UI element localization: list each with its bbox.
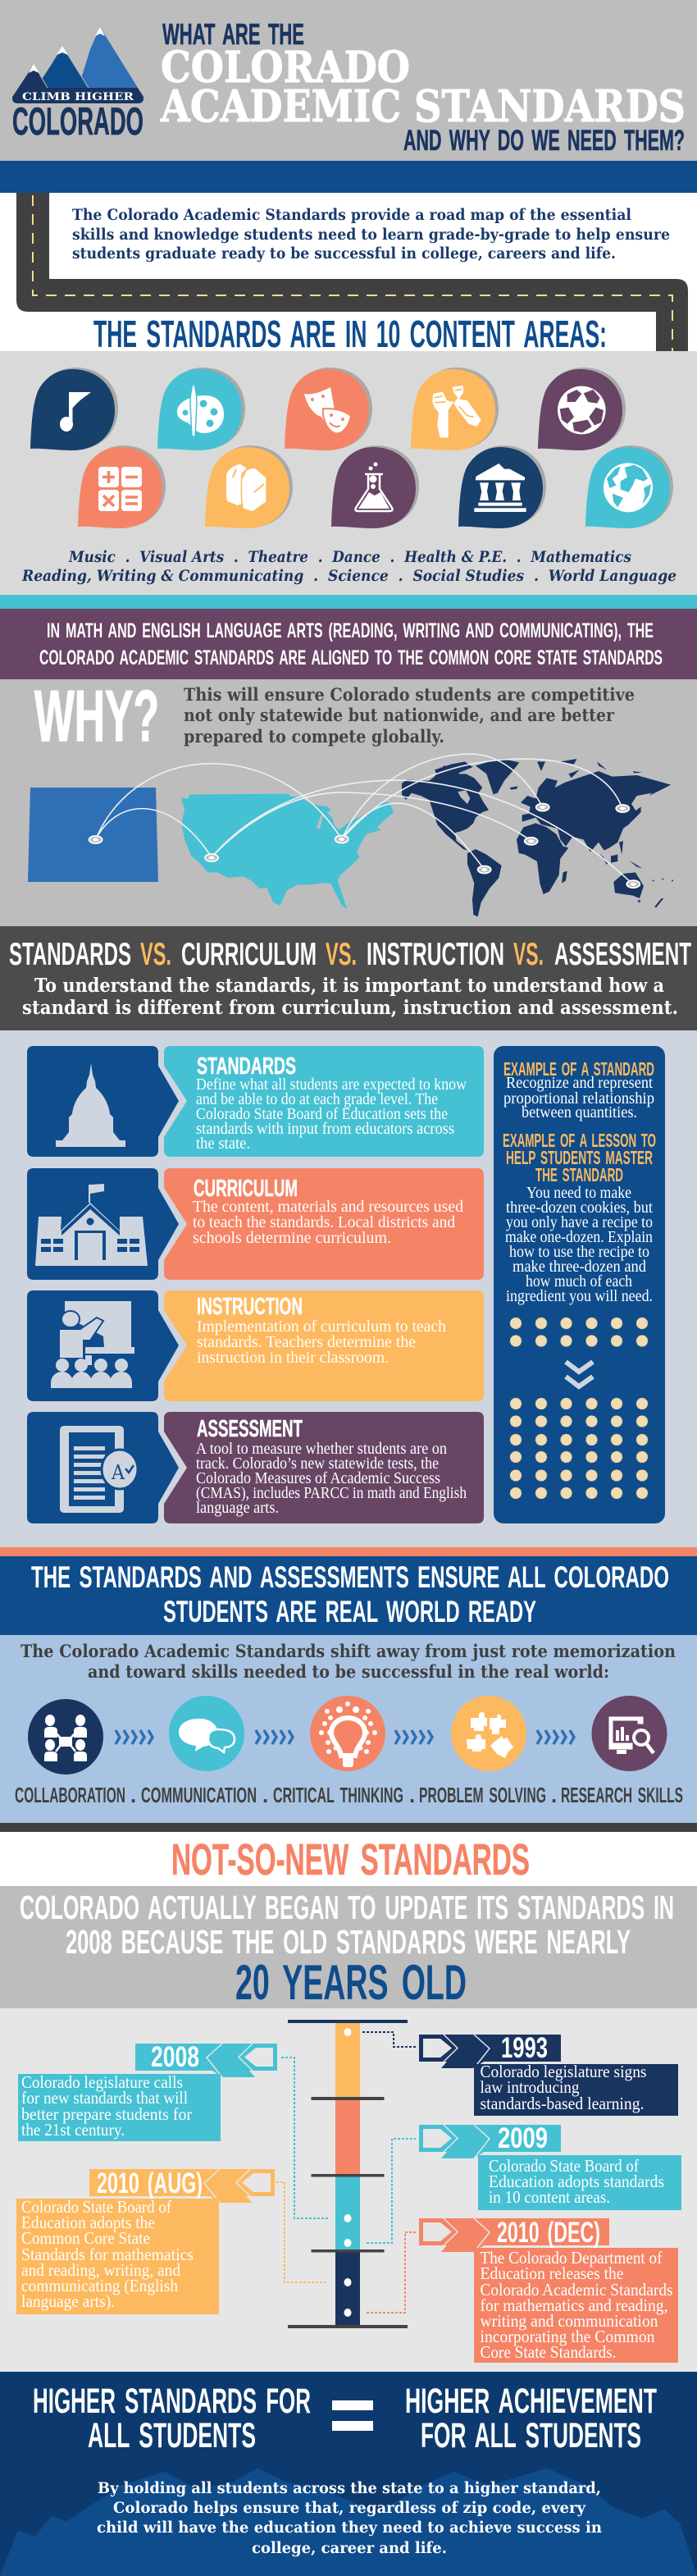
closing text: By holding all students across the state to a higher standard, — [98, 2479, 601, 2497]
logo: Climb Higher Colorado: CLIMB HIGHER — [22, 91, 134, 103]
event: 2010 December: writing and communication — [481, 2311, 658, 2331]
event: 2010 December: Education releases the — [481, 2263, 623, 2283]
icon: test paper — [60, 1426, 138, 1513]
card: instruction: Implementation of curriculum to teach — [197, 1318, 446, 1336]
card: standards: standards with input from educators across — [196, 1120, 454, 1138]
skill labels: . — [262, 1783, 268, 1807]
icon: teacher — [51, 1301, 134, 1388]
card: assessment: ASSESSMENT — [197, 1416, 303, 1442]
event: 1993 — [419, 2032, 678, 2116]
card: instruction: instruction in their classroom. — [197, 1349, 389, 1367]
card: assessment: language arts. — [196, 1499, 279, 1517]
card: curriculum — [27, 1168, 484, 1280]
equation: higher standards equals higher achievement: HIGHER STANDARDS FOR — [33, 2382, 311, 2421]
panel: standards vs curriculum heading: VS. — [140, 937, 171, 972]
equation: higher standards equals higher achievement — [33, 2382, 657, 2455]
panel: real world ready heading — [0, 1547, 697, 1635]
icon: problem solving — [451, 1696, 526, 1771]
icon: communication — [169, 1696, 244, 1771]
card: instruction — [27, 1290, 484, 1401]
icon: world language — [585, 445, 673, 528]
event: 1993: standards-based learning. — [481, 2094, 645, 2113]
card: standards: Colorado State Board of Education sets the — [196, 1105, 448, 1123]
event: 2010 December: incorporating the Common — [481, 2327, 655, 2346]
card: instruction: INSTRUCTION — [197, 1294, 303, 1320]
panel: example of a standard: make three-dozen and — [512, 1258, 646, 1276]
panel: example of a standard: how to use the recipe to — [509, 1243, 649, 1261]
title — [160, 17, 686, 157]
card: curriculum: to teach the standards. Local districts and — [193, 1213, 455, 1231]
skill labels — [15, 1783, 683, 1807]
skill labels: . — [130, 1783, 136, 1807]
event: 2009: in 10 content areas. — [489, 2187, 610, 2207]
arrows: chevrons between skills — [116, 1730, 574, 1744]
panel: example of a standard — [494, 1046, 665, 1523]
panel: example of a standard: how much of each — [526, 1272, 632, 1290]
event: 2009 — [419, 2122, 681, 2210]
panel: skills — [0, 1635, 697, 1832]
event: 2010 December: Colorado Academic Standards — [481, 2280, 672, 2300]
skill labels: CRITICAL THINKING — [273, 1783, 403, 1807]
panel: standards vs curriculum heading — [0, 926, 697, 1030]
subject labels: Music . Visual Arts . Theatre . Dance . Health & P.E. . Mathematics — [68, 548, 631, 566]
event: 2010 August: 2010 (AUG) — [97, 2167, 203, 2199]
panel: example of a standard: three-dozen cookies, but — [506, 1199, 653, 1217]
icon: capitol — [56, 1063, 125, 1147]
header panel — [0, 0, 697, 193]
road — [16, 193, 688, 351]
event: 2009: Education adopts standards — [489, 2172, 664, 2191]
band: common core alignment — [0, 595, 697, 680]
closing text — [97, 2479, 602, 2557]
event: 2010 August: Colorado State Board of — [21, 2197, 171, 2217]
card: assessment: track. Colorado’s new statewide tests, the — [196, 1455, 439, 1473]
icon: three dozen cookies — [510, 1398, 648, 1499]
logo: Climb Higher Colorado: COLORADO — [12, 99, 144, 143]
icon: critical thinking — [310, 1696, 385, 1771]
panel: standards vs curriculum heading: STANDARDS — [9, 937, 131, 972]
panel: example of a standard: THE STANDARD — [535, 1164, 623, 1185]
why text: not only statewide but nationwide, and are better — [184, 705, 615, 725]
panel: example of a standard: ingredient you will need. — [506, 1287, 653, 1305]
panel: footer — [0, 2372, 697, 2576]
icon: social studies — [458, 445, 546, 528]
event: 2010 August: Common Core State — [21, 2228, 150, 2248]
icon: reading, writing and communicating — [205, 445, 293, 528]
card: curriculum: The content, materials and resources used — [193, 1198, 463, 1216]
card: assessment: (CMAS), includes PARCC in math and English — [196, 1484, 467, 1502]
event: 2010 August: Education adopts the — [21, 2213, 155, 2232]
closing text: Colorado helps ensure that, regardless of zip code, every — [113, 2499, 586, 2517]
icon: double chevron arrow — [566, 1362, 593, 1386]
panel: example of a standard: between quantities. — [522, 1103, 637, 1121]
icon: music — [30, 368, 118, 450]
icon: science — [331, 445, 419, 528]
event: 1993: 1993 — [501, 2032, 548, 2064]
skill labels: . — [551, 1783, 557, 1807]
panel: standards vs curriculum heading: INSTRUCTION — [367, 937, 504, 972]
panel: content areas — [0, 351, 697, 595]
why text: This will ensure Colorado students are competitive — [184, 684, 635, 705]
event: 2010 August: communicating (English — [21, 2276, 178, 2295]
icon: research skills — [592, 1696, 667, 1771]
equation: higher standards equals higher achievement: ALL STUDENTS — [88, 2416, 256, 2455]
why text: prepared to compete globally. — [184, 726, 444, 747]
title: WHAT ARE THE — [162, 17, 304, 51]
event: 2010 August: and reading, writing, and — [21, 2260, 180, 2280]
panel: standards vs curriculum heading: VS. — [513, 937, 544, 972]
event: 2010 August: language arts). — [21, 2291, 115, 2311]
event: 2009: 2009 — [498, 2122, 548, 2154]
event: 2008: 2008 — [151, 2041, 199, 2073]
icon: school — [35, 1184, 148, 1266]
icon: test paper: A — [111, 1461, 125, 1484]
card: standards: STANDARDS — [197, 1053, 296, 1080]
card: assessment: A tool to measure whether students are on — [196, 1440, 447, 1458]
card: curriculum: CURRICULUM — [194, 1176, 298, 1202]
panel: example of a standard: make one-dozen. Explain — [505, 1228, 653, 1246]
skill labels: . — [409, 1783, 415, 1807]
closing text: child will have the education they need to achieve success in — [97, 2519, 602, 2537]
skill labels: COMMUNICATION — [141, 1783, 257, 1807]
event: 2008 — [18, 2041, 277, 2141]
card: assessment — [27, 1412, 484, 1523]
event: 2010 December: Core State Standards. — [481, 2342, 617, 2362]
icon: collaboration — [28, 1699, 103, 1774]
icon: dance — [411, 368, 499, 450]
event: 2008: Colorado legislature calls — [21, 2072, 183, 2092]
panel: timeline — [0, 2008, 697, 2372]
panel: example of a standard: proportional relationship — [503, 1089, 654, 1108]
event: 2010 August — [16, 2167, 275, 2314]
event: 2008: better prepare students for — [21, 2104, 192, 2124]
panel: 20 years old — [0, 1886, 697, 2010]
icon: mathematics — [78, 445, 166, 528]
event: 2010 December — [419, 2217, 678, 2363]
logo: Climb Higher Colorado — [12, 27, 144, 143]
event: 1993: Colorado legislature signs — [481, 2062, 646, 2081]
event: 2009: Colorado State Board of — [489, 2156, 639, 2176]
icon: health and P.E. — [538, 368, 626, 450]
card: standards: and be able to do at each grade level. The — [196, 1090, 438, 1108]
panel: example of a standard: You need to make — [526, 1184, 631, 1202]
subject labels — [21, 548, 676, 585]
event: 2008: the 21st century. — [21, 2120, 125, 2140]
event: 2010 August: Standards for mathematics — [21, 2245, 194, 2264]
icon: theatre masks — [285, 368, 372, 450]
closing text: college, career and life. — [252, 2539, 447, 2557]
panel: example of a standard: you only have a recipe to — [506, 1213, 653, 1231]
panel: standards vs curriculum heading: VS. — [326, 937, 357, 972]
card: standards: Define what all students are expected to know — [196, 1076, 467, 1094]
connectors — [276, 2032, 416, 2313]
panel: definitions — [0, 1030, 697, 1547]
event: 2010 December: 2010 (DEC) — [497, 2217, 600, 2249]
intro text: The Colorado Academic Standards provide a road map of the essential — [72, 206, 631, 224]
event: 2010 December: for mathematics and reading, — [481, 2295, 667, 2315]
panel: skills: and toward skills needed to be successful in the real world: — [88, 1661, 609, 1682]
skill labels: PROBLEM SOLVING — [419, 1783, 546, 1807]
mountains backdrop — [0, 2468, 697, 2576]
card: assessment: Colorado Measures of Academic Success — [196, 1469, 440, 1487]
card: standards: the state. — [196, 1135, 250, 1153]
intro text: students graduate ready to be successful in college, careers and life. — [72, 244, 616, 263]
panel: why — [0, 675, 697, 926]
timeline column — [288, 2020, 408, 2328]
heading: why: WHY? — [34, 675, 159, 756]
panel: standards vs curriculum heading: CURRICULUM — [181, 937, 317, 972]
event: 2010 December: The Colorado Department of — [481, 2248, 663, 2268]
title: COLORADO — [161, 43, 410, 93]
panel: 20 years old: 20 YEARS OLD — [235, 1955, 467, 2010]
intro text — [72, 206, 670, 263]
event: 2008: for new standards that will — [21, 2088, 188, 2108]
icon: visual arts — [157, 368, 245, 450]
why text — [184, 684, 635, 747]
event: 1993: law introducing — [481, 2077, 580, 2097]
skill labels: COLLABORATION — [15, 1783, 125, 1807]
card: curriculum: schools determine curriculum. — [193, 1229, 391, 1247]
card: instruction: standards. Teachers determine the — [197, 1333, 416, 1351]
panel: example of a standard: Recognize and represent — [506, 1074, 653, 1092]
map: Colorado, USA, world with arcs — [28, 754, 673, 916]
icon: one dozen cookies — [510, 1318, 648, 1347]
card: standards — [27, 1046, 484, 1157]
